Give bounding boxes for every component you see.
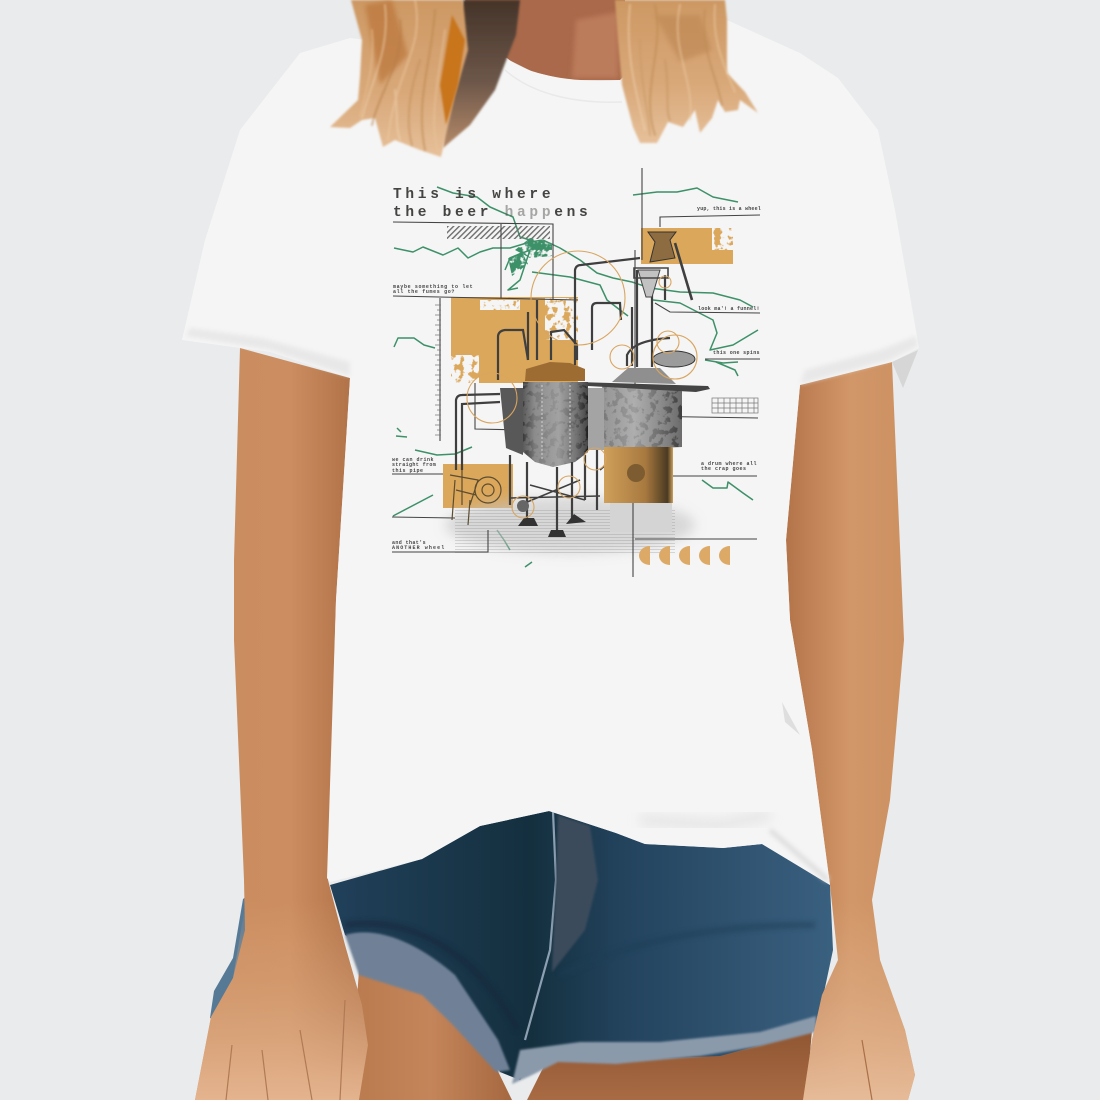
side vessel (500, 388, 523, 455)
right tank lid (612, 368, 676, 384)
left lock dark (365, 0, 408, 85)
platform (577, 382, 710, 392)
annotations: we can drink (392, 457, 434, 463)
left lock strands (360, 0, 445, 152)
right thigh fold (560, 925, 815, 975)
rolled left cuff (345, 932, 510, 1072)
sleeve tip shadow (892, 350, 918, 388)
annotations: the crap goes (701, 466, 747, 472)
annotations (392, 206, 761, 551)
green map lines (393, 187, 758, 567)
worn patches on panels (451, 228, 733, 383)
orange panel: fumes (451, 297, 578, 383)
ruler ticks (435, 305, 441, 435)
left arm and hand (195, 348, 368, 1100)
annotations: and that's (392, 540, 426, 546)
floor shading (445, 497, 695, 553)
left lock (330, 0, 468, 157)
right lock strands (629, 5, 735, 135)
fly placket (552, 815, 598, 972)
rivets (542, 385, 570, 460)
right tank flecks (602, 385, 682, 450)
furnace (604, 447, 673, 503)
floor hatching (455, 510, 675, 553)
furnace door (627, 464, 645, 482)
title (393, 187, 591, 221)
annotations: this one spins (713, 350, 760, 356)
hem fold shadow (640, 815, 770, 825)
back piece of shorts (210, 892, 290, 1030)
dark underlayer (443, 0, 520, 148)
annotations: a drum where all (701, 461, 757, 467)
stands (518, 514, 586, 537)
left tank (523, 382, 588, 467)
frayed hem (512, 1016, 816, 1084)
left thigh (350, 970, 512, 1100)
copper dome (525, 362, 585, 381)
blonde hair (330, 0, 758, 157)
pipes (456, 243, 692, 530)
annotations: ANOTHER wheel (392, 545, 445, 551)
furnace base block (610, 500, 672, 532)
construction lines (392, 168, 760, 577)
funnel wheel (648, 232, 676, 262)
annotations: straight from (392, 462, 436, 468)
left leg fold (345, 924, 518, 1030)
fly seam (525, 812, 556, 1040)
right lock dark (655, 15, 712, 62)
spreadsheet grid (712, 398, 758, 413)
neck highlight (572, 12, 618, 78)
right lock (615, 0, 758, 143)
hatching (447, 226, 550, 239)
green blotch (508, 238, 552, 276)
right thigh (527, 1030, 812, 1100)
orange panel: wheel (641, 228, 733, 264)
annotations: look ma'! a funnel! (698, 306, 760, 312)
white t-shirt (182, 20, 919, 885)
neck and chest skin (465, 0, 625, 80)
right arm and hand (786, 362, 915, 1100)
denim shorts (330, 811, 833, 1084)
annotations: yup, this is a wheel (697, 206, 761, 212)
right tank (602, 385, 682, 450)
printed graphic (392, 168, 761, 577)
collar rib (505, 70, 622, 102)
title: the beer happens (393, 205, 591, 221)
sleeve shading left (186, 328, 350, 376)
left lock orange streak (440, 15, 465, 125)
orange panel: gears (443, 464, 513, 508)
annotations: maybe something to let (393, 284, 473, 290)
pump (517, 500, 529, 512)
left tank flecks (523, 382, 588, 467)
gear machine (450, 470, 501, 525)
middle section (588, 388, 604, 450)
funnel (638, 270, 660, 297)
sleeve shading right (800, 336, 918, 384)
side crease (770, 830, 828, 880)
annotations: all the fumes go? (393, 289, 455, 295)
side fold (782, 702, 800, 735)
half moons (639, 546, 730, 565)
funnel top plate (634, 268, 668, 278)
spinner (653, 351, 695, 367)
annotations: this pipe (392, 468, 424, 474)
brewing machine illustration (450, 232, 710, 537)
orange circles (467, 251, 697, 518)
title: This is where (393, 187, 554, 203)
